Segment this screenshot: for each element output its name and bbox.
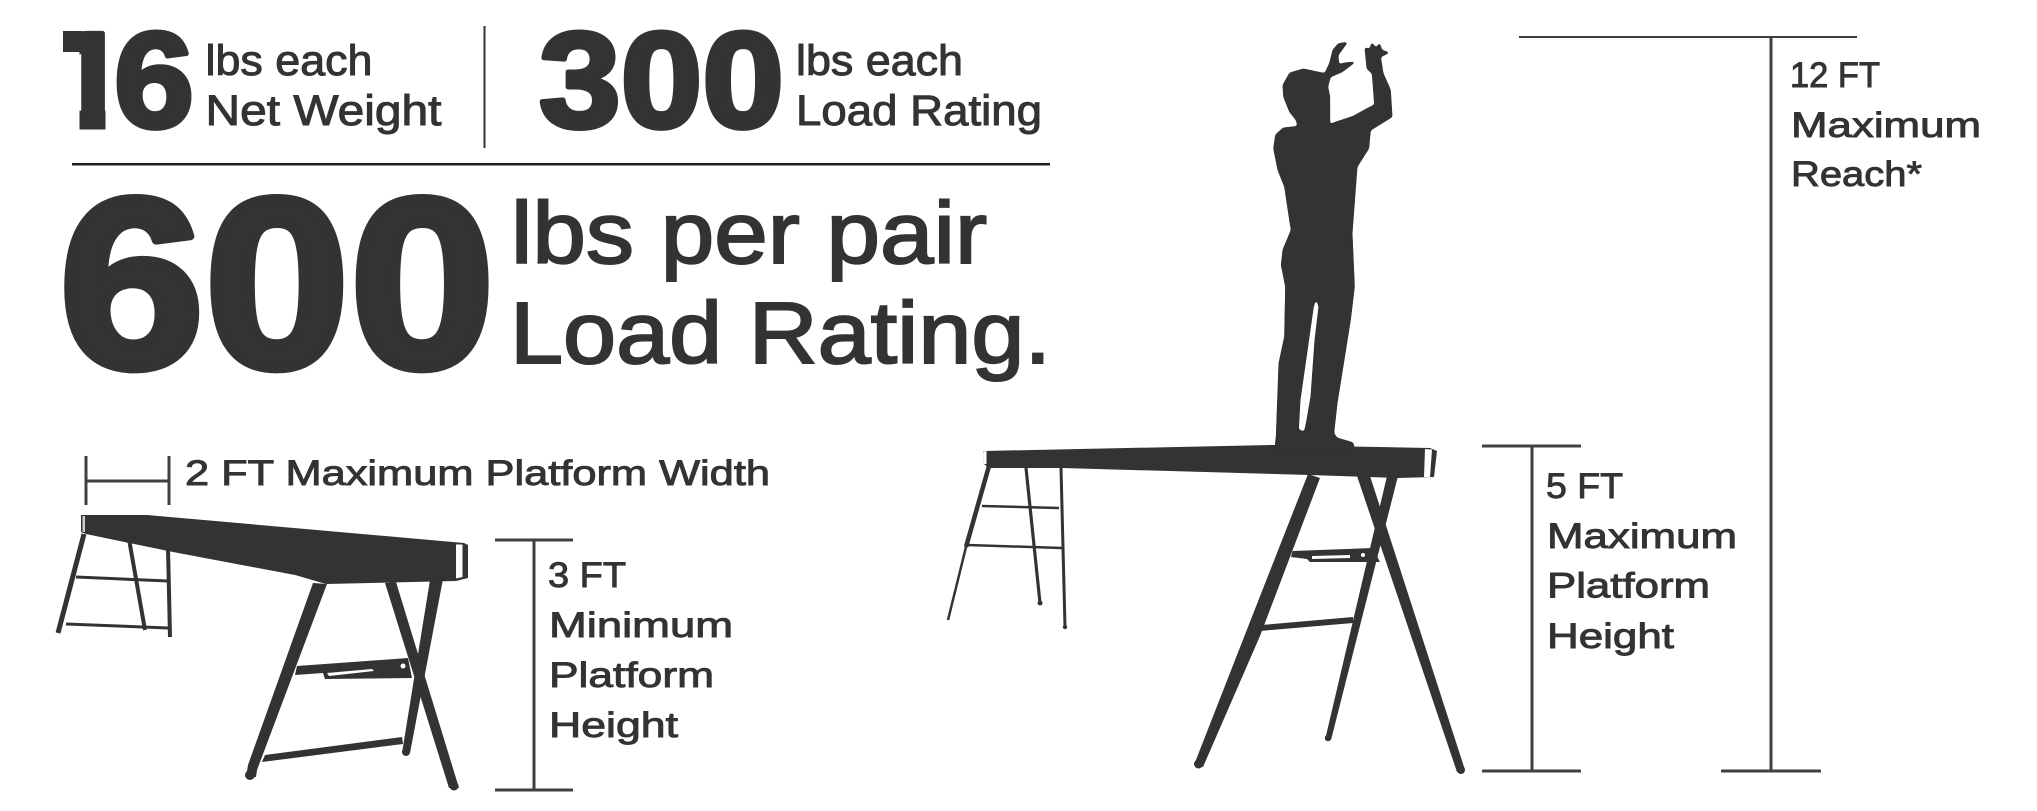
platform: low setting [81,515,468,584]
label: 5 ft maximum platform height: Platform [1547,566,1710,606]
height bracket: 12 ft [1519,37,1857,771]
label: 5 ft maximum platform height: Maximum [1547,517,1737,556]
label: 12 ft maximum reach: 12 FT [1790,56,1880,95]
stat: 600 lbs per pair load rating: Load Rating. [510,285,1051,382]
label: 12 ft maximum reach: Reach* [1791,155,1922,194]
stat: 600 lbs per pair load rating: 600 [59,149,495,419]
stat: 16 lbs each net weight [44,4,442,156]
label: 3 ft minimum platform height: Platform [549,656,714,695]
stat: 600 lbs per pair load rating: lbs per pair [511,185,987,282]
height bracket: 3 ft [495,540,573,790]
width bracket: 2 ft [86,456,169,505]
label: 3 ft minimum platform height [548,556,733,745]
front legs: large sawhorse [1194,474,1465,774]
stat: 300 lbs each load rating [539,4,1042,156]
label: 12 ft maximum reach: Maximum [1791,106,1981,145]
person silhouette: standing on platform reaching up [1274,43,1392,450]
label: 5 ft maximum platform height: Height [1547,617,1674,656]
divider: between weight and load rating [484,26,486,148]
label: 5 ft maximum platform height [1546,467,1737,656]
label: 5 ft maximum platform height: 5 FT [1546,467,1623,506]
label: 12 ft maximum reach [1790,56,1981,194]
rear legs: small sawhorse [948,466,1067,629]
divider: horizontal rule [72,163,1050,166]
stat: 16 lbs each net weight: 6 [114,4,194,156]
stat: 16 lbs each net weight: lbs each [206,37,372,85]
label: 3 ft minimum platform height: Minimum [549,606,733,645]
sawhorse: maximum height with platform [948,445,1465,774]
platform: high setting [983,445,1437,478]
stat: 300 lbs each load rating: Load Rating [796,87,1042,135]
label: 3 ft minimum platform height: Height [549,706,678,745]
stat: 300 lbs each load rating: 300 [539,4,784,156]
stat: 600 lbs per pair load rating [59,149,1051,419]
height bracket: 5 ft [1482,446,1581,771]
stat: 16 lbs each net weight: 1 [52,4,128,156]
sawhorse: minimum height, angled view [58,515,468,790]
label: 2 ft maximum platform width: 2 FT Maximum Platform Width [185,454,770,493]
stat: 300 lbs each load rating: lbs each [796,37,963,85]
label: 3 ft minimum platform height: 3 FT [548,556,626,595]
front legs: large sawhorse [245,579,459,790]
stat: 16 lbs each net weight: Net Weight [206,87,442,135]
rear legs: small sawhorse [58,534,170,637]
